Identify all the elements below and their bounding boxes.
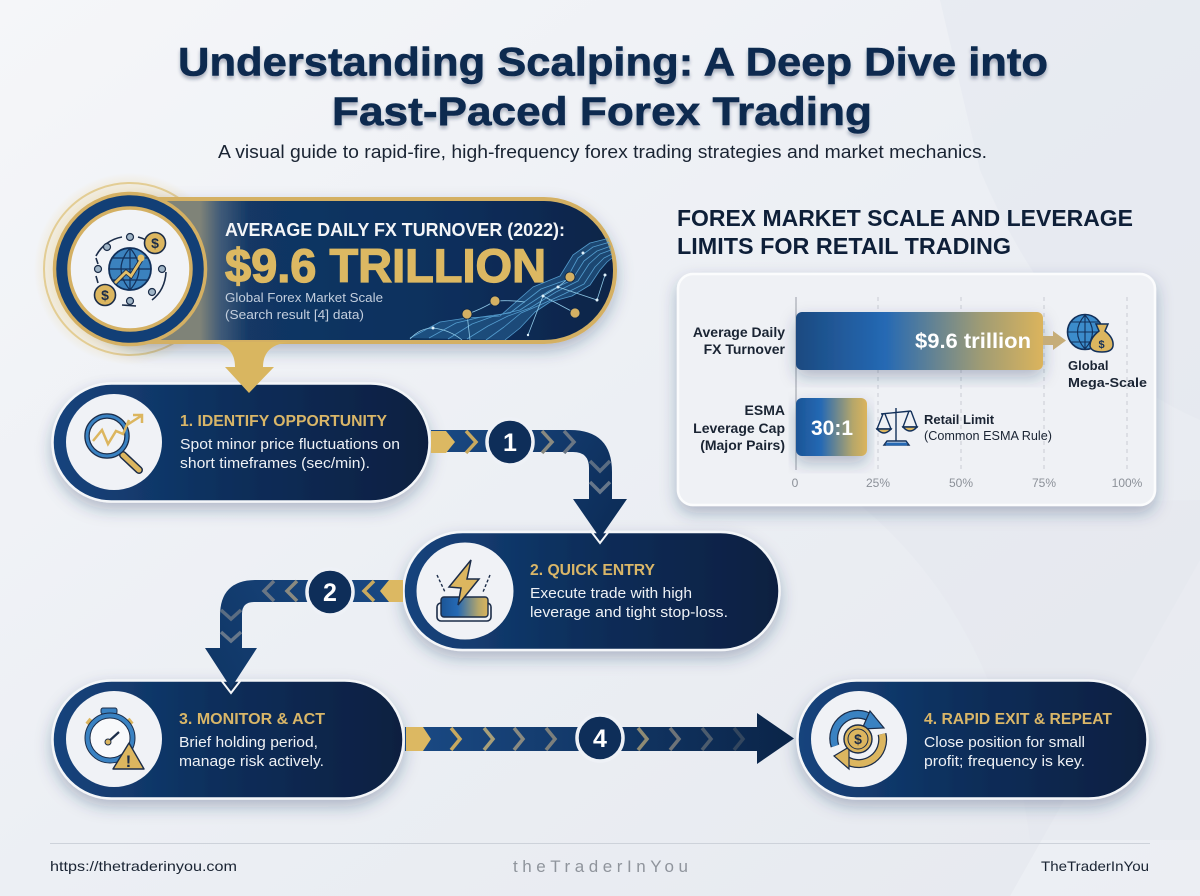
panel: bar chart <box>678 274 1155 505</box>
hero decorative network <box>410 238 612 340</box>
step 4 title: 4. RAPID EXIT & REPEAT <box>924 711 1112 728</box>
chart heading: FOREX MARKET SCALE AND LEVERAGE <box>677 205 1133 231</box>
step 2 text <box>530 585 728 621</box>
icon: globe and money bag <box>1068 314 1113 352</box>
bar: leverage cap <box>796 398 867 456</box>
axis ticks: 100% <box>1112 476 1143 490</box>
footer watermark: theTraderInYou <box>513 857 688 876</box>
hero value: $9.6 TRILLION <box>225 239 546 292</box>
bar: leverage cap: 30:1 <box>811 417 853 440</box>
step 2 text: Execute trade with high <box>530 585 692 602</box>
callout: retail limit: Retail Limit <box>924 412 995 427</box>
icon: globe with coins: $ <box>101 287 109 303</box>
chart heading: LIMITS FOR RETAIL TRADING <box>677 233 1011 259</box>
step 1 title: 1. IDENTIFY OPPORTUNITY <box>180 413 387 430</box>
step 4 text <box>924 734 1085 770</box>
bar labels: ESMA <box>745 402 785 418</box>
subtitle: A visual guide to rapid-fire, high-frequency forex trading strategies and market mechanics. <box>218 141 987 162</box>
hero note <box>225 291 383 322</box>
panel: step 4 <box>798 680 1148 798</box>
bar: daily turnover <box>796 312 1043 370</box>
callout: mega-scale: Global <box>1068 358 1108 373</box>
icon: stopwatch with warning: ! <box>126 752 131 771</box>
footer brand: TheTraderInYou <box>1041 858 1149 874</box>
connector 1 <box>431 419 627 543</box>
step 3 title: 3. MONITOR & ACT <box>179 711 325 728</box>
bar labels: (Major Pairs) <box>700 437 785 453</box>
callout: mega-scale: Mega-Scale <box>1068 375 1147 390</box>
icon: lightning on bar <box>437 560 491 621</box>
bar: daily turnover: $9.6 trillion <box>915 330 1031 353</box>
step 4 text: profit; frequency is key. <box>924 753 1085 770</box>
icon: repeat coin: $ <box>854 731 862 747</box>
chart heading <box>677 205 1133 259</box>
callout: retail limit: (Common ESMA Rule) <box>924 429 1052 443</box>
bar labels: Leverage Cap <box>693 420 785 436</box>
bar labels <box>693 324 786 453</box>
step 1 text: Spot minor price fluctuations on <box>180 436 400 453</box>
icon: scales <box>877 408 917 445</box>
title <box>178 40 1048 134</box>
icon: repeat coin <box>834 711 884 769</box>
panel: step 3 <box>52 680 404 798</box>
connector 3: 4 <box>593 725 607 753</box>
axis ticks <box>792 476 1143 490</box>
connector 2 <box>205 569 403 693</box>
footer <box>50 844 1150 876</box>
panel: hero turnover <box>34 173 615 365</box>
icon: stopwatch with warning <box>87 708 144 771</box>
axis ticks: 0 <box>792 476 799 490</box>
hero note: Global Forex Market Scale <box>225 291 383 305</box>
axis ticks: 75% <box>1032 476 1056 490</box>
panel: step 1 <box>52 384 430 502</box>
step 4 text: Close position for small <box>924 734 1085 751</box>
step 3 text: Brief holding period, <box>179 734 318 751</box>
connector 1: 1 <box>503 429 517 457</box>
connector 2: 2 <box>323 579 337 607</box>
axis ticks: 25% <box>866 476 890 490</box>
step 2 title: 2. QUICK ENTRY <box>530 562 655 579</box>
step 3 text <box>179 734 324 770</box>
panel: step 2 <box>404 532 780 650</box>
icon: globe and money bag: $ <box>1098 339 1105 351</box>
callout: retail limit <box>924 412 1052 443</box>
title: Fast-Paced Forex Trading <box>332 90 872 134</box>
step 1 text: short timeframes (sec/min). <box>180 455 370 472</box>
step 1 text <box>180 436 400 472</box>
axis ticks: 50% <box>949 476 973 490</box>
bar labels: Average Daily <box>693 324 785 340</box>
connector 3 <box>405 713 794 764</box>
callout: mega-scale <box>1068 358 1147 390</box>
icon: globe with coins: $ <box>151 235 159 251</box>
hero note: (Search result [4] data) <box>225 308 364 322</box>
hero label: AVERAGE DAILY FX TURNOVER (2022): <box>225 220 565 240</box>
icon: globe with coins <box>94 232 166 306</box>
step 2 text: leverage and tight stop-loss. <box>530 604 728 621</box>
bar labels: FX Turnover <box>704 341 786 357</box>
icon: magnifier chart <box>87 415 142 470</box>
connector: hero down arrow <box>209 342 291 393</box>
footer url: https://thetraderinyou.com <box>50 858 237 874</box>
arrow: to mega-scale <box>1043 331 1066 350</box>
title: Understanding Scalping: A Deep Dive into <box>178 40 1048 84</box>
step 3 text: manage risk actively. <box>179 753 324 770</box>
